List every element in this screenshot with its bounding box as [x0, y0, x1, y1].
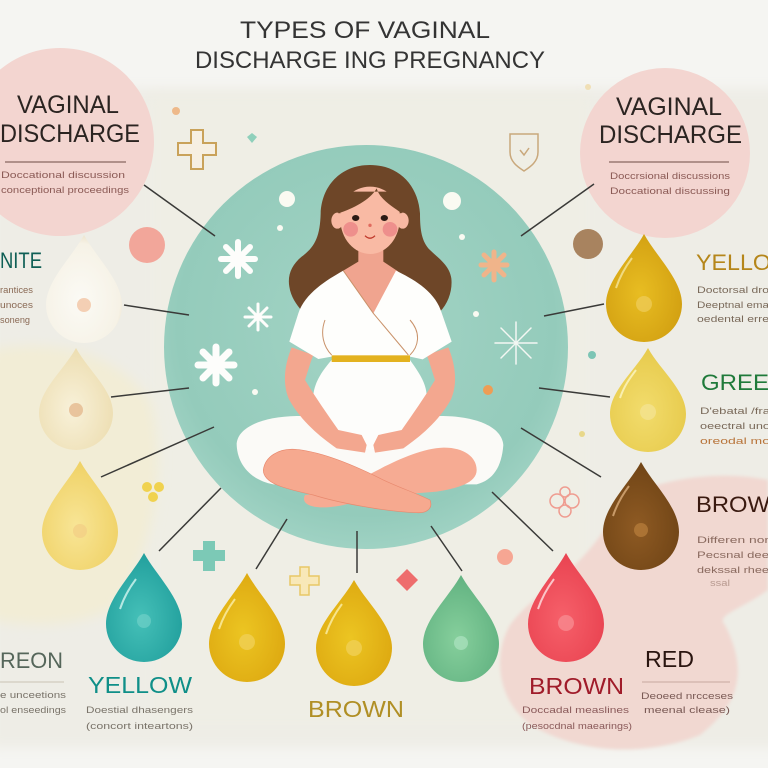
panel: left vaginal discharge circle — [0, 48, 154, 236]
label: brown center: BROWN — [308, 696, 404, 722]
decorative icon: teal cross — [193, 541, 225, 571]
decorative icons: white dots on circle — [252, 191, 493, 395]
label: green right: oeectral uno — [700, 421, 768, 431]
decorative icon: snowflake 1 — [221, 242, 255, 276]
drop: lemon — [610, 348, 686, 452]
decorative icon: brown circle — [573, 229, 603, 259]
panel: left vaginal discharge circle: VAGINAL — [17, 91, 119, 119]
drop: brown — [603, 462, 679, 570]
near leg — [263, 449, 431, 513]
neck — [342, 247, 398, 315]
drop: yellow 2 — [316, 580, 392, 686]
face — [340, 187, 400, 254]
background blob: pale yellow — [0, 346, 158, 624]
label: green right: oreodal mo — [700, 436, 768, 446]
white trousers — [237, 416, 503, 484]
label: brown right: BROW — [696, 492, 768, 517]
label: yellow left: Doestial dhasengers — [86, 705, 193, 716]
decorative icon: pink flower — [550, 487, 579, 517]
far leg — [304, 448, 477, 507]
decorative icon: yellow cross — [290, 567, 319, 595]
panel: right vaginal discharge circle: DISCHARGE — [599, 121, 742, 149]
label: brown right — [696, 492, 768, 588]
title: TYPES OF VAGINAL — [240, 17, 490, 44]
label: red: RED — [645, 646, 694, 672]
panel: right vaginal discharge circle: Doccrsional discussions — [610, 171, 730, 182]
belly — [313, 360, 427, 450]
decorative icon: salmon circle — [129, 227, 165, 263]
label: brown right: ssal — [710, 578, 730, 588]
label: brown red — [522, 673, 632, 732]
ears — [331, 213, 409, 229]
decorative icon: red flower — [396, 569, 418, 591]
person: pregnant woman seated — [237, 165, 503, 513]
label: green left — [0, 648, 67, 715]
label: yellow right — [696, 250, 768, 324]
fringe — [337, 188, 403, 213]
label: white: NITE — [0, 248, 42, 273]
panel: left vaginal discharge circle: conceptional proceedings — [1, 185, 129, 196]
drop: teal — [106, 553, 182, 662]
label: brown red: (pesocdnal maearings) — [522, 721, 632, 732]
label: yellow right: Deeptnal ema — [697, 300, 768, 310]
drop: yellow 1 — [209, 573, 285, 682]
label: yellow left: (concort inteartons) — [86, 721, 193, 732]
label: green right: GREE — [701, 370, 768, 395]
drop: white — [46, 235, 122, 343]
label: yellow left: YELLOW — [88, 672, 192, 698]
decorative icon: orange flower — [481, 252, 507, 280]
label: yellow right: YELLO — [696, 250, 768, 275]
panel: left vaginal discharge circle: Doccational discussion — [1, 170, 125, 181]
label: red: meenal clease) — [644, 705, 730, 716]
central teal circle — [164, 145, 568, 549]
decorative icon: outlined cross — [178, 130, 216, 169]
decorative icon: yellow flower — [142, 482, 164, 502]
title: DISCHARGE ING PREGNANCY — [195, 47, 545, 74]
drop: green — [423, 575, 499, 682]
title — [195, 17, 545, 74]
label: white — [0, 248, 42, 325]
decorative icons: small dots — [172, 84, 596, 565]
decorative icon: line snowflake — [495, 322, 537, 364]
label: brown right: Differen nor — [697, 535, 768, 545]
cheeks and features — [343, 215, 397, 238]
belt — [332, 355, 410, 362]
label: yellow right: oedental erre — [697, 314, 768, 324]
panel: right vaginal discharge circle: Doccational discussing — [610, 186, 730, 197]
label: white: soneng — [0, 315, 30, 325]
label: white: unoces — [0, 300, 34, 310]
label: white: rantices — [0, 285, 34, 295]
label: brown right: dekssal rhee — [697, 565, 768, 575]
label: yellow right: Doctorsal dro — [697, 285, 768, 295]
hair — [289, 165, 452, 312]
drop: pale yellow — [42, 461, 118, 570]
arms — [285, 347, 455, 453]
blouse — [289, 271, 452, 359]
drop: cream — [39, 348, 113, 450]
label: red — [641, 646, 733, 716]
label: red: Deoeed nrcceses — [641, 691, 733, 702]
decorative icon: shield — [510, 134, 538, 171]
drop: red — [528, 553, 604, 662]
label: green left: ol enseedings — [0, 705, 67, 715]
label: green left: e unceetions — [0, 690, 67, 700]
background blob: pink — [500, 476, 768, 749]
label: green left: REON — [0, 648, 63, 673]
label: green right: D'ebatal /fra — [700, 406, 768, 416]
decorative icon: snowflake 3 — [198, 347, 234, 383]
label: brown right: Pecsnal dee — [697, 550, 768, 560]
drop: gold — [606, 234, 682, 342]
panel: right vaginal discharge circle: VAGINAL — [616, 93, 722, 121]
label: brown red: BROWN — [529, 673, 624, 699]
connector lines — [101, 184, 610, 573]
decorative icon: snowflake 2 — [245, 304, 271, 330]
label: green right — [700, 370, 768, 446]
blouse wrap line — [323, 271, 418, 355]
panel: left vaginal discharge circle: DISCHARGE — [0, 120, 140, 148]
panel: right vaginal discharge circle — [580, 68, 750, 238]
label: yellow left — [86, 672, 193, 732]
label: brown red: Doccadal measlines — [522, 705, 629, 716]
